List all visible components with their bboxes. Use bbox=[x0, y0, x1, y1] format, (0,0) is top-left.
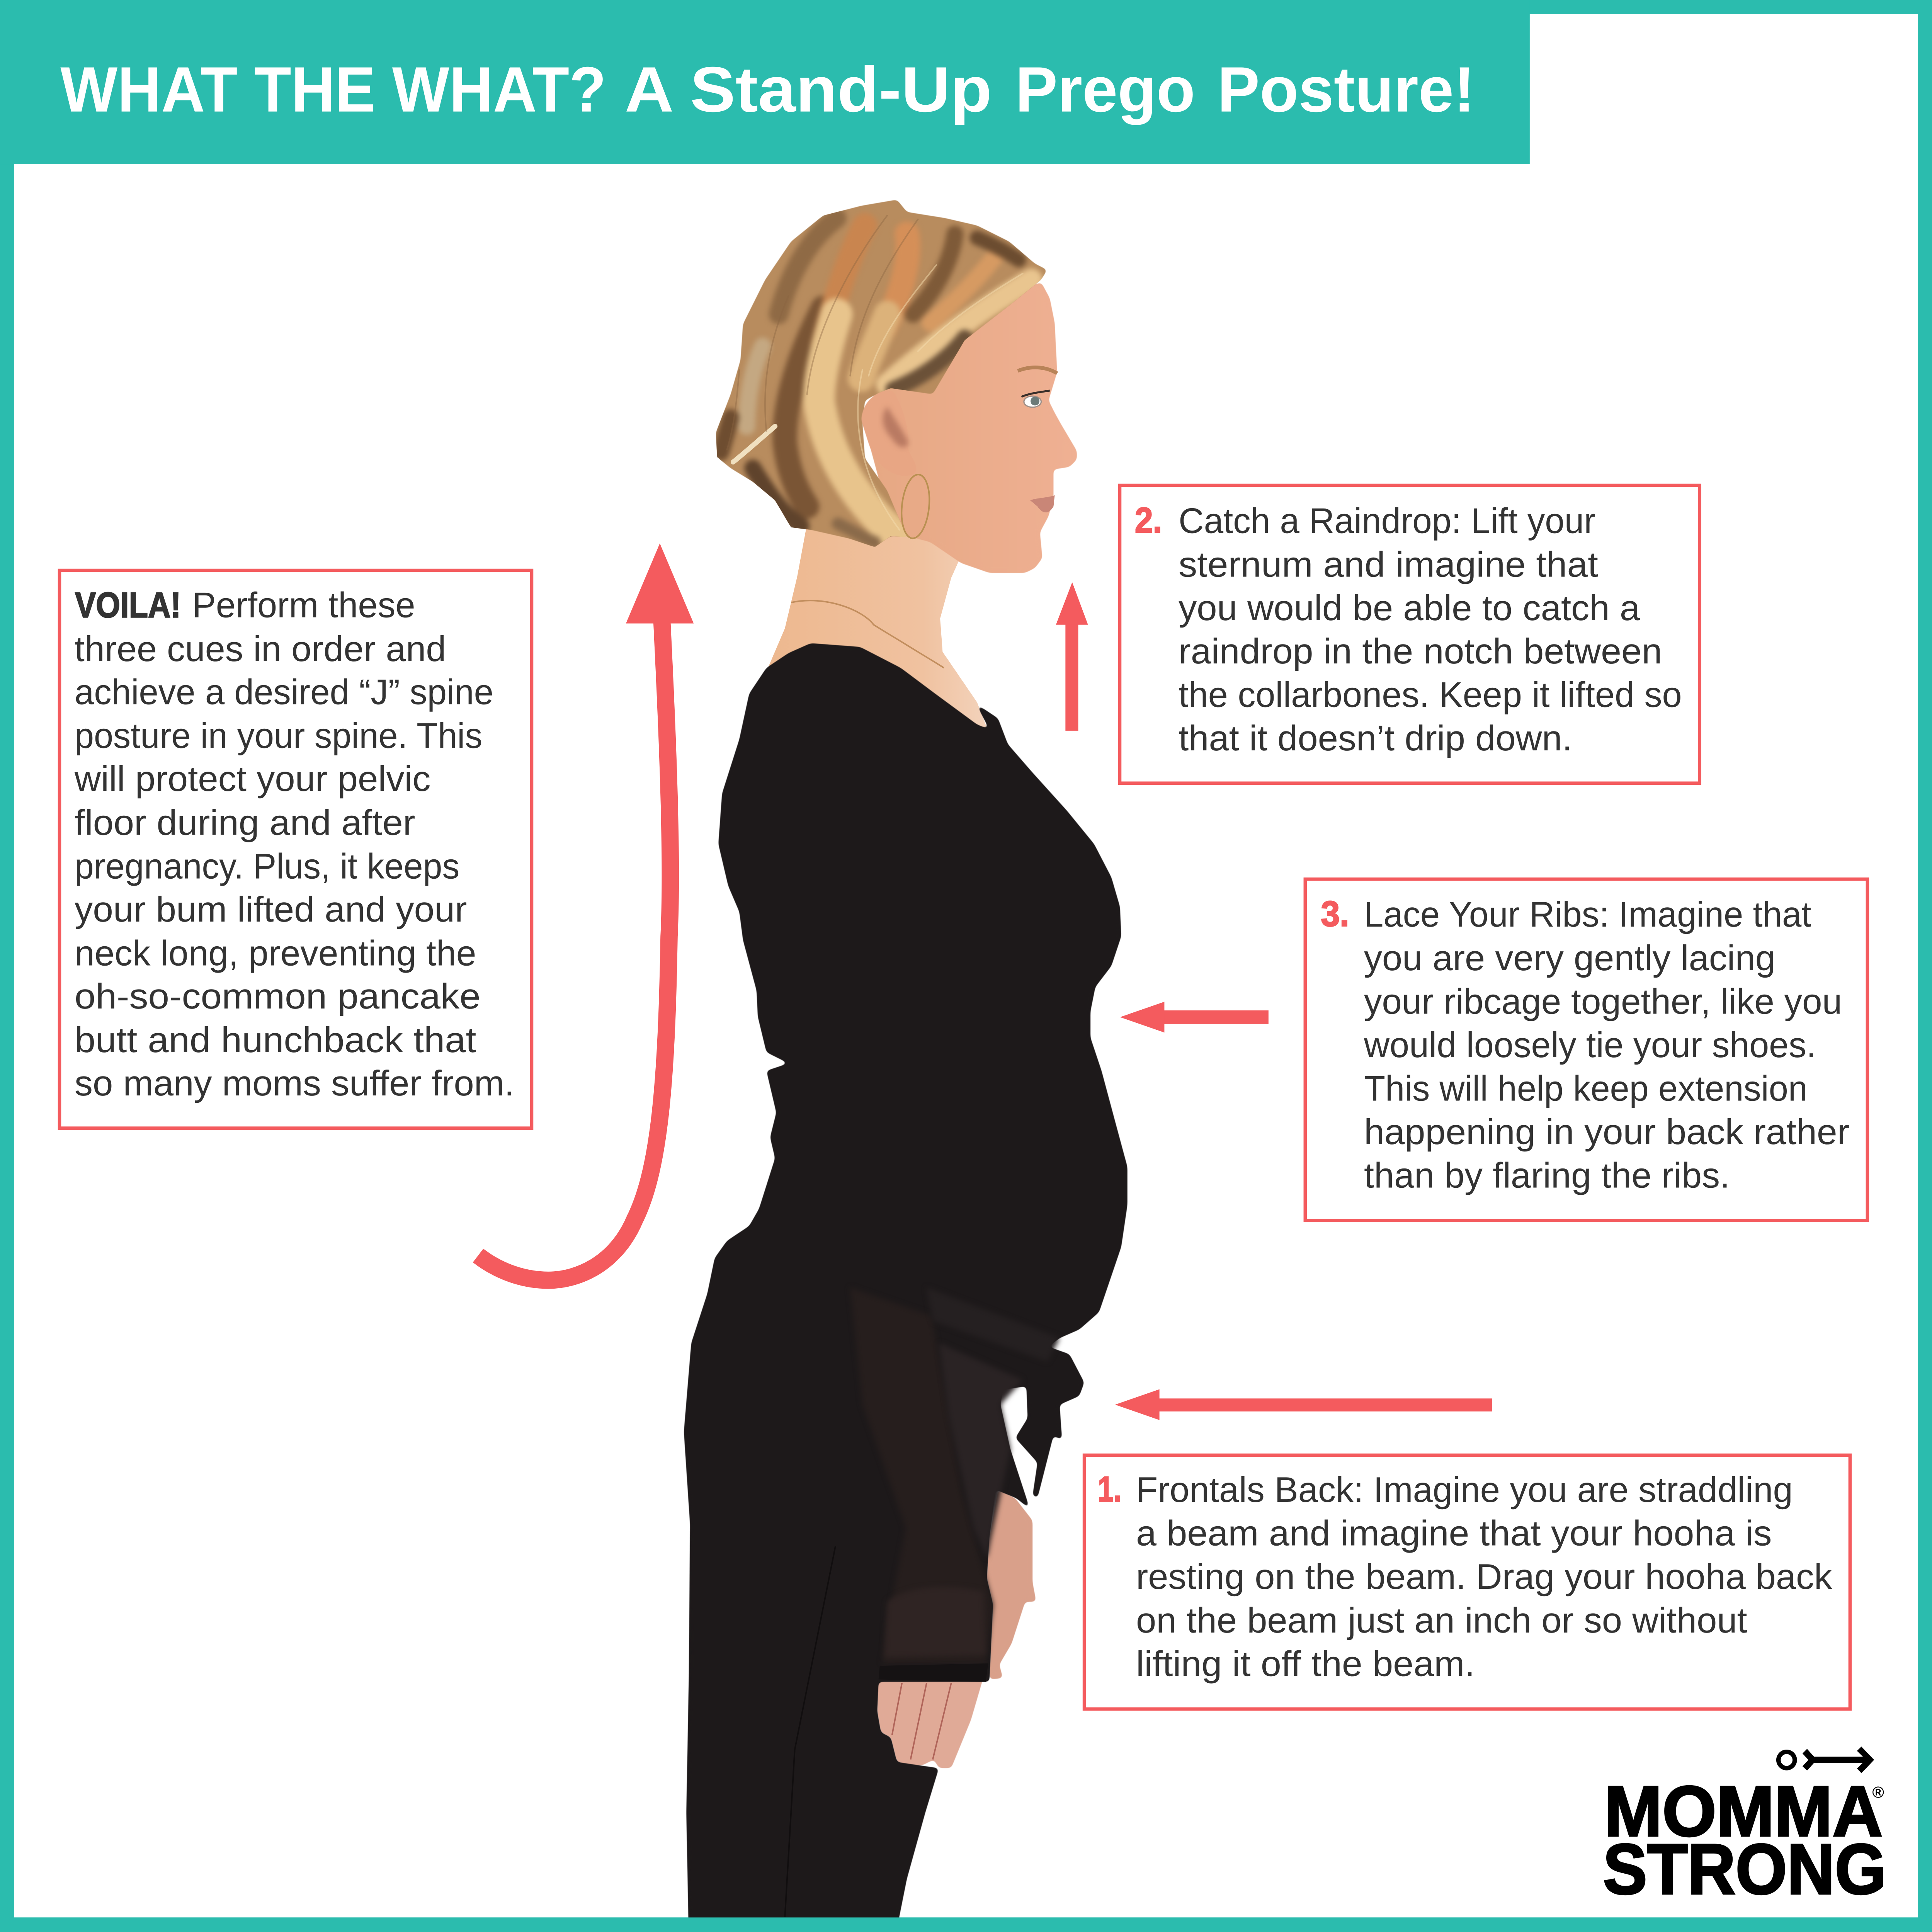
lips bbox=[1030, 495, 1055, 512]
voila text: VOILA! bbox=[75, 587, 181, 626]
black top and trousers silhouette bbox=[684, 643, 1128, 1932]
title banner bbox=[0, 0, 1530, 164]
panel: voila summary bbox=[60, 570, 532, 1128]
eye and brow bbox=[1018, 367, 1057, 407]
bottom frame strip bbox=[0, 1917, 1932, 1932]
step 2 text: that it doesn’t drip down. bbox=[1179, 719, 1572, 759]
panel: step 1 frontals back bbox=[1084, 1455, 1850, 1709]
arrow: to ribs bbox=[1120, 1002, 1269, 1032]
arrow: to frontals bbox=[1115, 1389, 1492, 1420]
mesh sleeve bbox=[850, 1287, 993, 1663]
registered mark: ® bbox=[1872, 1783, 1884, 1801]
logo word: Momma: MOMMA bbox=[1604, 1772, 1883, 1852]
neck and chest skin bbox=[766, 517, 990, 735]
cuff hem bbox=[879, 1663, 988, 1682]
step 2 text: sternum and imagine that bbox=[1179, 546, 1598, 585]
ear bbox=[861, 391, 917, 476]
waistband bbox=[927, 1287, 1060, 1362]
arrow: J spine curve bbox=[478, 543, 694, 1280]
title: WHAT THE WHAT? bbox=[60, 55, 606, 126]
icon: circle and arrow bbox=[1779, 1747, 1874, 1773]
title bbox=[60, 55, 1475, 126]
title: Posture! bbox=[1218, 55, 1475, 126]
trouser centre crease bbox=[785, 1546, 835, 1917]
step 3 text: happening in your back rather bbox=[1364, 1113, 1850, 1153]
voila text: oh-so-common pancake bbox=[75, 978, 481, 1017]
voila text: your bum lifted and your bbox=[75, 891, 468, 930]
number 3: 3. bbox=[1321, 895, 1349, 935]
title: A Stand-Up bbox=[625, 55, 992, 126]
number 1: 1. bbox=[1098, 1471, 1121, 1510]
necklace bbox=[791, 600, 944, 668]
voila text: achieve a desired “J” spine bbox=[75, 673, 493, 713]
step 3 text: your ribcage together, like you bbox=[1364, 983, 1842, 1022]
sheer cuff over hand bbox=[885, 1587, 986, 1657]
voila text bbox=[73, 587, 514, 1104]
step 1 text: Frontals Back: Imagine you are straddling bbox=[1136, 1471, 1793, 1510]
voila text: pregnancy. Plus, it keeps bbox=[75, 848, 459, 887]
step 3 text: than by flaring the ribs. bbox=[1364, 1157, 1730, 1196]
step 1 text: lifting it off the beam. bbox=[1136, 1645, 1475, 1685]
panel: step 2 catch a raindrop bbox=[1120, 485, 1700, 783]
far hand bbox=[987, 1490, 1036, 1679]
voila text: neck long, preventing the bbox=[75, 935, 476, 974]
voila text: butt and hunchback that bbox=[75, 1021, 476, 1061]
face bbox=[862, 282, 1077, 573]
near hand bbox=[877, 1670, 986, 1768]
voila text: will protect your pelvic bbox=[73, 760, 430, 800]
step 2 text: you would be able to catch a bbox=[1179, 589, 1641, 629]
voila text: Perform these bbox=[192, 587, 415, 626]
title: Prego bbox=[1015, 55, 1195, 126]
number 2: 2. bbox=[1135, 502, 1162, 541]
step 3 text: would loosely tie your shoes. bbox=[1363, 1026, 1816, 1066]
panel: step 3 lace your ribs bbox=[1305, 879, 1867, 1220]
step 2 text bbox=[1179, 502, 1682, 759]
logo: Momma Strong bbox=[1603, 1747, 1886, 1910]
trouser front panel bbox=[939, 1343, 1023, 1559]
step 3 text: you are very gently lacing bbox=[1364, 939, 1776, 979]
finger lines bbox=[892, 1683, 951, 1760]
step 1 text: on the beam just an inch or so without bbox=[1136, 1602, 1747, 1641]
hair streaks bbox=[721, 216, 1031, 542]
step 1 text bbox=[1136, 1471, 1833, 1685]
step 3 text: This will help keep extension bbox=[1364, 1070, 1808, 1109]
step 3 text bbox=[1363, 896, 1850, 1196]
step 1 text: resting on the beam. Drag your hooha back bbox=[1136, 1558, 1833, 1598]
step 3 text: Lace Your Ribs: Imagine that bbox=[1364, 896, 1811, 935]
arrow: up to sternum bbox=[1056, 582, 1088, 731]
step 2 text: Catch a Raindrop: Lift your bbox=[1179, 502, 1596, 542]
hoop earring bbox=[899, 473, 932, 540]
step 2 text: the collarbones. Keep it lifted so bbox=[1179, 676, 1682, 716]
step 2 text: raindrop in the notch between bbox=[1179, 633, 1662, 672]
photo: pregnant woman standing in profile bbox=[684, 200, 1128, 1932]
hair base bbox=[716, 200, 1047, 547]
voila text: floor during and after bbox=[75, 804, 416, 844]
voila text: three cues in order and bbox=[75, 630, 446, 670]
logo word: Strong: STRONG bbox=[1603, 1830, 1886, 1910]
voila text: so many moms suffer from. bbox=[75, 1065, 514, 1104]
step 1 text: a beam and imagine that your hooha is bbox=[1136, 1515, 1772, 1554]
voila text: posture in your spine. This bbox=[75, 717, 482, 757]
